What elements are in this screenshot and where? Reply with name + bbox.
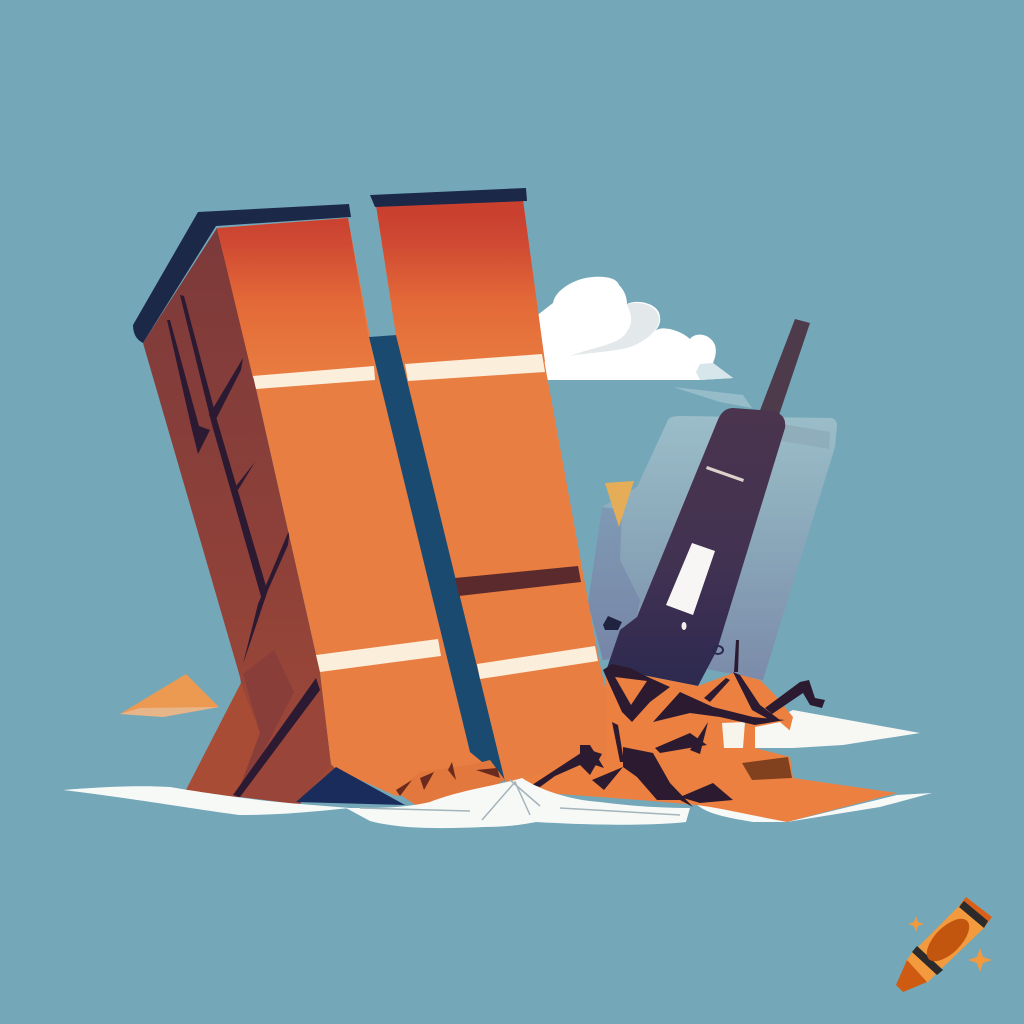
rubble: white fragment <box>722 722 745 748</box>
crayon cap <box>960 897 992 925</box>
icon: cloud <box>535 277 733 380</box>
rubble: small left orange pile <box>396 760 505 808</box>
wall: lower facets <box>186 650 331 804</box>
water: white foam and splash <box>63 778 932 828</box>
crayon tip <box>896 960 927 992</box>
rubble: debris pile <box>296 640 920 822</box>
rubble: white paper right <box>753 710 920 748</box>
tower: right building roof <box>370 188 527 207</box>
icon: background ghost building <box>588 387 837 680</box>
tower: gap shadow strip <box>369 335 505 781</box>
rubble: orange mass <box>505 668 897 822</box>
icon: dark vacuum device <box>603 319 810 686</box>
rubble: dark cracks <box>532 640 825 807</box>
tower: left building front face <box>217 218 505 796</box>
tower: left building roof <box>133 204 351 343</box>
crayon bands <box>959 901 988 928</box>
rubble: orange wedge inside crack <box>615 677 647 705</box>
icon: small orange debris left <box>120 674 219 717</box>
crayon body <box>906 897 992 983</box>
tower: left building side wall <box>143 228 336 804</box>
logo: crayon <box>896 897 992 992</box>
tower: right building front face <box>376 200 612 781</box>
rubble: brown trapezoid <box>742 757 792 780</box>
rubble: navy triangle <box>296 767 405 805</box>
wall: cracks <box>167 295 320 797</box>
